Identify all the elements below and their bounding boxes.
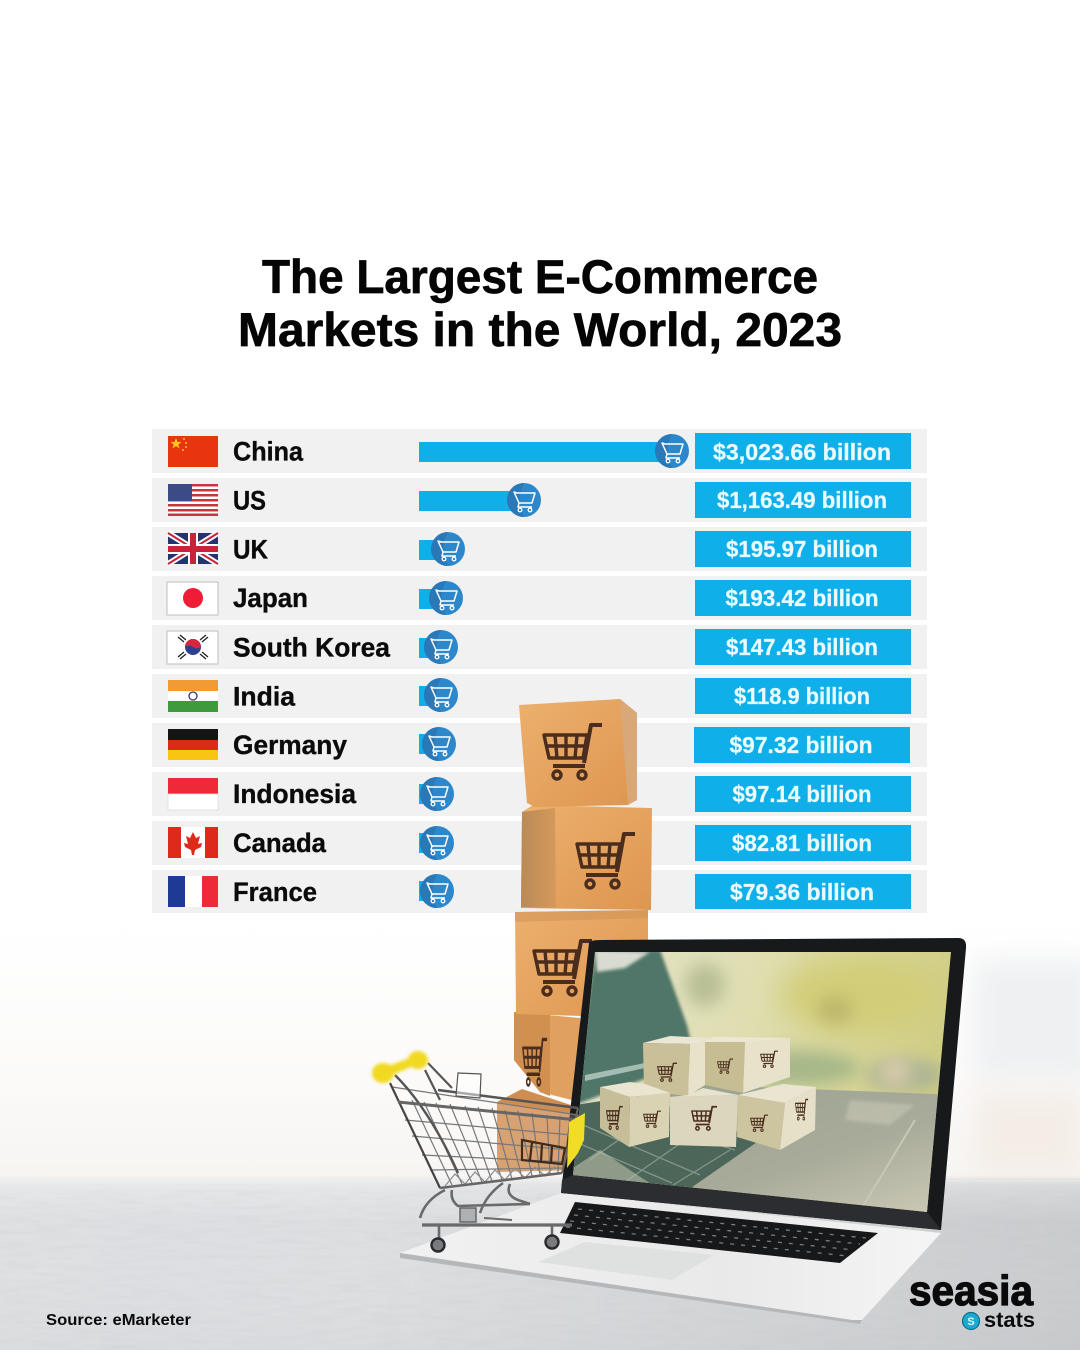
shopping cart xyxy=(372,1051,585,1252)
title: Markets in the World, 2023 xyxy=(238,303,842,356)
flag: Germany xyxy=(168,729,218,760)
icon: cart Germany xyxy=(422,727,456,761)
icon: cart US xyxy=(507,483,541,517)
row: Germany xyxy=(152,723,927,767)
row: Japan xyxy=(152,576,927,620)
row: Canada xyxy=(152,821,927,865)
logo: seasia stats: stats xyxy=(984,1309,1035,1332)
row: Japan: Japan xyxy=(233,583,308,613)
flag: Canada xyxy=(168,827,218,858)
box 2 xyxy=(521,805,652,910)
row: South Korea: $147.43 billion xyxy=(726,634,878,660)
row: France xyxy=(152,870,927,913)
laptop lid xyxy=(561,938,966,1230)
flag: China xyxy=(168,436,218,467)
row: UK: UK xyxy=(233,534,268,564)
flag: India xyxy=(168,680,218,712)
row: South Korea: South Korea xyxy=(233,632,391,662)
flag: Indonesia xyxy=(168,778,218,810)
row: India: India xyxy=(233,682,296,712)
title: The Largest E-Commerce xyxy=(262,250,818,303)
row: UK: $195.97 billion xyxy=(726,536,878,562)
box 4 xyxy=(514,1012,580,1102)
screen boxes xyxy=(600,1036,816,1150)
row: US xyxy=(152,478,927,522)
screen box C xyxy=(600,1082,670,1147)
row: India xyxy=(152,674,927,718)
screen image xyxy=(570,950,960,1215)
row: France: France xyxy=(233,877,317,907)
flag: UK xyxy=(168,533,218,564)
row: US: $1,163.49 billion xyxy=(717,487,887,513)
cart yellow bumper xyxy=(567,1113,585,1168)
row: China xyxy=(152,429,927,473)
cart basket wires xyxy=(390,1063,578,1188)
flag: US xyxy=(168,484,218,516)
box 1 xyxy=(519,699,637,807)
row: China: China xyxy=(233,436,304,466)
row: South Korea xyxy=(152,625,927,669)
box 3 xyxy=(515,910,648,1018)
table of markets xyxy=(152,429,927,913)
trackpad xyxy=(538,1242,714,1280)
box 5 xyxy=(497,1089,580,1172)
logo: seasia stats: seasia xyxy=(909,1267,1034,1314)
icon: cart India xyxy=(424,678,458,712)
icon: cart Indonesia xyxy=(420,777,454,811)
flag: South Korea xyxy=(167,631,218,664)
laptop base xyxy=(400,1193,941,1324)
icon: cart UK xyxy=(431,532,465,566)
screen box D xyxy=(670,1088,738,1147)
row: Germany: Germany xyxy=(233,730,347,760)
row: Indonesia xyxy=(152,772,927,816)
screen box B xyxy=(705,1037,790,1093)
stack of cardboard boxes xyxy=(497,699,652,1172)
row: Japan: $193.42 billion xyxy=(726,585,878,611)
row: US: US xyxy=(233,486,266,516)
row: Canada: $82.81 billion xyxy=(732,830,872,856)
keyboard xyxy=(560,1202,878,1263)
row: Germany: $97.32 billion xyxy=(730,732,872,758)
row: Indonesia: $97.14 billion xyxy=(732,781,872,807)
row: India: $118.9 billion xyxy=(734,683,870,709)
icon: cart Japan xyxy=(429,581,463,615)
screen box A xyxy=(643,1036,710,1096)
row: Indonesia: Indonesia xyxy=(233,779,357,809)
row: UK xyxy=(152,527,927,571)
row: China: $3,023.66 billion xyxy=(713,439,891,465)
icon: cart China xyxy=(655,434,689,468)
row: France: $79.36 billion xyxy=(730,879,874,905)
screen box E xyxy=(737,1084,816,1150)
cart yellow handle xyxy=(372,1051,428,1083)
cart chassis xyxy=(420,1183,572,1238)
cart wheels xyxy=(432,1236,558,1252)
source note: Source: eMarketer xyxy=(46,1312,191,1329)
laptop xyxy=(400,938,966,1324)
flag: Japan xyxy=(167,582,218,615)
icon: cart France xyxy=(420,874,454,908)
title xyxy=(238,250,842,356)
icon: cart South Korea xyxy=(424,630,458,664)
flag: France xyxy=(168,876,218,907)
row: Canada: Canada xyxy=(233,828,327,858)
concrete floor xyxy=(0,1180,1080,1350)
logo icon: S xyxy=(967,1316,975,1328)
icon: cart Canada xyxy=(420,826,454,860)
